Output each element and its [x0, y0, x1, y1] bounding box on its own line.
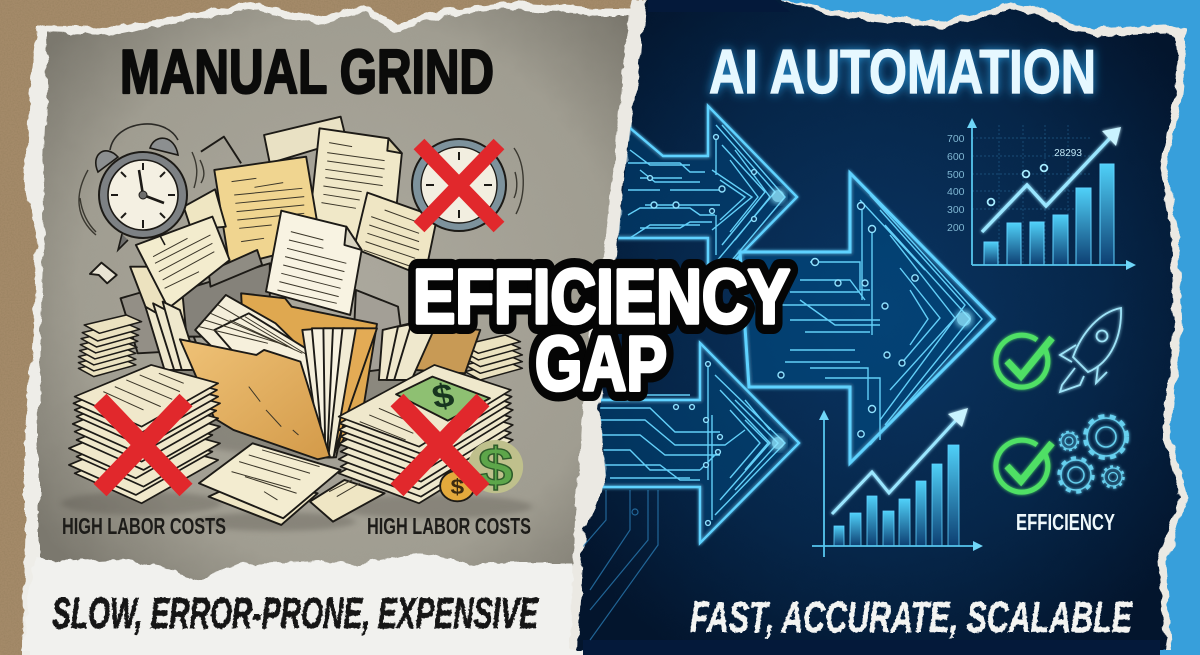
background: blue paper [775, 0, 1200, 655]
icon: crossed-out clock [412, 139, 523, 231]
banknote [396, 376, 490, 421]
document: behind clock [184, 189, 226, 230]
arrow: large centre [740, 173, 994, 463]
coin: green dollar: $ [478, 436, 513, 498]
caption: slow error-prone expensive: SLOW, ERROR-PRONE, EXPENSIVE [52, 589, 539, 638]
icon: rocket [1060, 308, 1121, 392]
title outline: GAP [535, 321, 667, 407]
torn white rim of grey panel [22, 2, 660, 650]
icon: green check bottom [996, 440, 1052, 492]
grey paper surface [38, 9, 660, 640]
gear small right [1102, 466, 1124, 488]
folder: open main folder [180, 293, 377, 459]
axis labels [947, 133, 965, 234]
heading: ai automation: AI AUTOMATION [709, 38, 1096, 107]
crumpled scrap [90, 263, 117, 283]
document: left tilted page [130, 217, 230, 347]
gear small top [1060, 432, 1078, 450]
chart: lower bar chart [812, 408, 983, 557]
axis labels: 300 [947, 204, 965, 216]
navy edge fill at page top and bottom [583, 0, 1160, 655]
illustration: pile of paperwork [61, 117, 532, 531]
document: right page [354, 193, 437, 277]
axis labels: 500 [947, 169, 965, 181]
title outline: EFFICIENCY [413, 254, 790, 340]
white rim base at page bottom [22, 640, 622, 655]
banknote: $ [429, 376, 457, 416]
label: high labor costs right: HIGH LABOR COSTS [367, 513, 531, 539]
title fill [413, 254, 790, 407]
right paper stack [339, 365, 513, 503]
coin: gold [440, 471, 475, 501]
circuit traces [628, 125, 785, 272]
arrow: top small [618, 102, 800, 266]
loose paper scribble [201, 137, 241, 163]
circuit traces [600, 365, 785, 520]
torn white caption strip [22, 554, 620, 650]
red cross: left stack [100, 400, 186, 490]
axis labels: 600 [947, 151, 965, 163]
left and right pages fan [145, 302, 438, 380]
axis labels: 200 [947, 222, 965, 234]
torn white rim of navy panel [570, 0, 1188, 650]
icon: alarm clock [79, 124, 204, 250]
title fill: GAP [535, 321, 667, 407]
arrow: bottom small [578, 343, 799, 543]
title fill: EFFICIENCY [413, 254, 790, 340]
back document [264, 117, 346, 163]
left paper stack [69, 365, 220, 503]
document: front page [266, 211, 362, 315]
folder: grey back right [352, 290, 406, 373]
document: tall page [308, 128, 402, 248]
chart: upper bar chart [947, 118, 1136, 270]
coin: gold: $ [451, 474, 464, 499]
axis labels: 700 [947, 133, 965, 145]
panel: ai automation [570, 0, 1188, 655]
gear large [1085, 416, 1127, 458]
background circuit traces lower left [580, 490, 658, 640]
red cross on clock [419, 144, 499, 227]
centre title: efficiency gap [413, 254, 790, 407]
label: high labor costs left: HIGH LABOR COSTS [62, 513, 226, 539]
folder: grey back left [121, 250, 270, 353]
panel: manual grind [22, 2, 660, 655]
shadows on the table [61, 343, 532, 531]
background paper stacks [78, 315, 522, 380]
axis labels: 400 [947, 186, 965, 198]
circuit traces [780, 195, 982, 445]
caption strip base [30, 630, 600, 655]
label: efficiency: EFFICIENCY [1016, 509, 1115, 535]
heading: manual grind: MANUAL GRIND [120, 38, 494, 107]
chart: upper bar chart: 28293 [1054, 148, 1082, 159]
tan folder behind right [415, 325, 480, 373]
navy surface [578, 0, 1180, 650]
title outline [413, 254, 790, 407]
paper under the folder [199, 443, 385, 525]
icon: green check top [996, 335, 1052, 387]
red cross: right stack [397, 400, 483, 490]
icon: gears [1059, 416, 1127, 492]
document: yellow page [214, 157, 321, 267]
gear medium [1059, 458, 1093, 492]
coin: green dollar [468, 436, 523, 498]
